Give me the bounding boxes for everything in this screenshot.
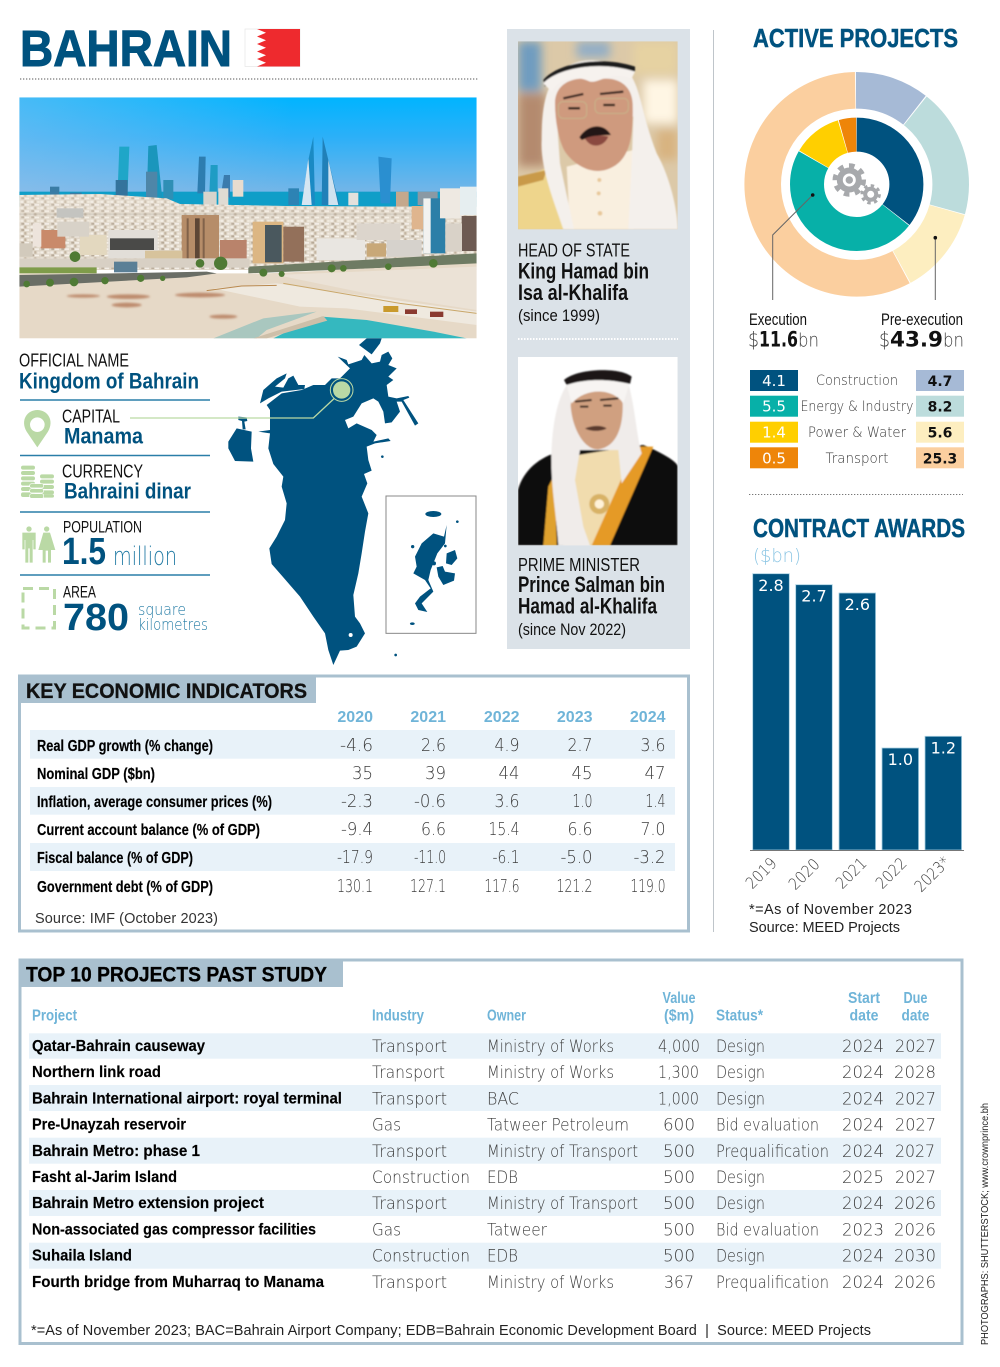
- row 6: 2025: [842, 1168, 884, 1187]
- icon: Bahrain flag: [245, 29, 300, 66]
- chart: contract awards bars: 2.8: [758, 576, 784, 595]
- area: kilometres: [138, 615, 208, 634]
- row 4: Bid evaluation: [716, 1116, 819, 1135]
- row: government debt: 127.1: [410, 877, 446, 897]
- legend: project sectors: [750, 370, 964, 468]
- execution total: 11.6: [759, 328, 798, 352]
- row 5: 500: [663, 1142, 695, 1161]
- year header: 2023: [557, 709, 593, 726]
- row 2: [32, 1063, 936, 1082]
- row: government debt: 121.2: [556, 877, 592, 897]
- chart: contract awards bars: 2019: [742, 854, 781, 893]
- row: fiscal balance: -6.1: [492, 848, 520, 868]
- row 6: Design: [716, 1168, 765, 1187]
- inset map: [386, 496, 476, 633]
- row 10: [32, 1273, 936, 1292]
- row 5: [32, 1142, 935, 1161]
- icon: people: [22, 526, 55, 563]
- row 9: 500: [663, 1247, 695, 1266]
- row: current account balance: Current account balance (% of GDP): [37, 822, 260, 839]
- caption: head of state: King Hamad bin: [518, 258, 649, 284]
- row 5: 2024: [842, 1142, 884, 1161]
- row: real GDP growth: 2.7: [568, 736, 592, 756]
- row 8: 2026: [894, 1220, 936, 1239]
- population: 1.5: [62, 531, 106, 573]
- row: fiscal balance: [37, 848, 666, 868]
- row: real GDP growth: [37, 736, 666, 756]
- row 1: Design: [716, 1037, 765, 1056]
- row 2: 1,300: [658, 1063, 699, 1082]
- area: AREA: [63, 583, 96, 602]
- row 3: Transport: [372, 1089, 447, 1108]
- row 1: Transport: [372, 1037, 447, 1056]
- row 7: Transport: [372, 1194, 447, 1213]
- title: Bahrain: BAHRAIN: [20, 20, 232, 77]
- row 3: 1,000: [658, 1089, 699, 1108]
- chart: contract awards bars: 2.7: [801, 587, 827, 606]
- year header: 2024: [630, 709, 666, 726]
- chart: contract awards bars: 1.0: [888, 750, 913, 769]
- row 3: [32, 1089, 936, 1108]
- row 10: Prequalification: [716, 1273, 829, 1292]
- pre-execution total: [879, 310, 964, 352]
- footnote: *=As of November 2023; BAC=Bahrain Airport Company; EDB=Bahrain Economic Development Board | Source: MEED Projects: [31, 1323, 871, 1339]
- table header: Owner: [487, 1008, 526, 1025]
- row: nominal GDP: 39: [425, 764, 446, 784]
- year header: 2021: [410, 709, 446, 726]
- legend: project sectors: 4.1: [762, 372, 786, 390]
- row 8: Gas: [372, 1220, 401, 1239]
- row 6: 2027: [895, 1168, 936, 1187]
- execution total: $: [748, 328, 759, 352]
- icon: gears: [835, 166, 879, 203]
- row 9: EDB: [487, 1247, 518, 1266]
- row: current account balance: 6.6: [568, 820, 592, 840]
- row 6: 500: [663, 1168, 695, 1187]
- execution total: Execution: [749, 310, 807, 329]
- capital: Manama: [64, 424, 144, 448]
- outer ring: pre-execution: [763, 90, 951, 278]
- icon: dashed area square: [23, 588, 54, 628]
- row 4: Gas: [372, 1116, 401, 1135]
- row: fiscal balance: -3.2: [634, 848, 666, 868]
- table header: Due: [904, 990, 928, 1007]
- currency: CURRENCY: [62, 462, 143, 482]
- legend: project sectors: 25.3: [923, 451, 957, 467]
- legend: project sectors: Transport: [826, 451, 889, 467]
- caption: head of state: Isa al-Khalifa: [518, 280, 629, 305]
- legend: project sectors: 0.5: [762, 449, 786, 467]
- panel: leaders: [507, 29, 690, 649]
- area: [63, 583, 208, 639]
- pre-execution total: Pre-execution: [881, 310, 963, 329]
- row 6: EDB: [487, 1168, 518, 1187]
- execution total: [748, 310, 819, 352]
- population: [62, 518, 177, 573]
- row: current account balance: [37, 820, 666, 840]
- row: current account balance: 7.0: [640, 820, 666, 840]
- pre-execution total: 43.9: [890, 328, 943, 352]
- year header: 2020: [337, 709, 373, 726]
- row 3: Design: [716, 1089, 765, 1108]
- row 6: Construction: [372, 1168, 470, 1187]
- row: inflation: -2.3: [341, 792, 373, 812]
- official name: OFFICIAL NAME: [19, 351, 129, 371]
- row 8: [32, 1220, 936, 1239]
- row 10: 2024: [842, 1273, 884, 1292]
- chart: contract awards bars: [742, 574, 964, 896]
- row 1: 2024: [842, 1037, 884, 1056]
- row 8: Bid evaluation: [716, 1220, 819, 1239]
- source note: Source: IMF (October 2023): [35, 911, 218, 927]
- row 6: [32, 1168, 936, 1187]
- note: contract awards source: Source: MEED Projects: [749, 920, 900, 936]
- row 9: Construction: [372, 1247, 470, 1266]
- table header: Project: [32, 1008, 78, 1025]
- photo credit: PHOTOGRAPHS: SHUTTERSTOCK; www.crownprince.bh: [979, 1103, 991, 1345]
- note: contract awards source: *=As of November 2023: [749, 902, 912, 918]
- row: government debt: 130.1: [337, 877, 373, 897]
- table header: Start: [848, 990, 881, 1007]
- currency: [62, 462, 191, 504]
- caption: prime minister: [518, 555, 665, 639]
- row 9: Suhaila Island: [32, 1248, 132, 1265]
- caption: head of state: (since 1999): [518, 306, 600, 325]
- row 6: Fasht al-Jarim Island: [32, 1169, 177, 1186]
- row 4: Pre-Unayzah reservoir: [32, 1117, 186, 1134]
- legend: project sectors: Energy & Industry: [800, 399, 914, 415]
- row 10: Transport: [372, 1273, 447, 1292]
- legend: project sectors: 5.5: [762, 398, 786, 416]
- chart: contract awards bars: 2022: [872, 854, 911, 893]
- pre-execution total: $: [879, 328, 890, 352]
- leader lines: [773, 193, 937, 300]
- row 1: 4,000: [658, 1037, 700, 1056]
- legend: project sectors: Power & Water: [808, 425, 906, 441]
- row: nominal GDP: 35: [352, 764, 373, 784]
- row: nominal GDP: 47: [644, 764, 666, 784]
- execution total: bn: [798, 330, 819, 352]
- row: inflation: [37, 792, 666, 812]
- chart: contract awards bars: 1.2: [931, 738, 956, 757]
- row 1: [32, 1037, 936, 1056]
- row 1: Qatar-Bahrain causeway: [32, 1038, 205, 1055]
- row: government debt: Government debt (% of GDP): [37, 879, 213, 896]
- row 3: 2027: [895, 1089, 936, 1108]
- connector: capital to Manama: [130, 379, 353, 418]
- table header: Value: [662, 990, 696, 1007]
- row 8: 2023: [842, 1220, 884, 1239]
- row 9: Design: [716, 1247, 765, 1266]
- row: fiscal balance: Fiscal balance (% of GDP): [37, 850, 193, 867]
- row 5: Transport: [372, 1142, 447, 1161]
- area: 780: [63, 597, 129, 639]
- row 9: 2024: [842, 1247, 884, 1266]
- panel: top 10 projects: [19, 959, 962, 1344]
- row: real GDP growth: 4.9: [494, 736, 520, 756]
- row 8: 500: [663, 1220, 695, 1239]
- row 2: Northern link road: [32, 1064, 161, 1081]
- row: government debt: 117.6: [484, 877, 520, 897]
- caption: head of state: HEAD OF STATE: [518, 241, 630, 261]
- capital: [62, 406, 144, 448]
- row: current account balance: 6.6: [421, 820, 446, 840]
- heading: active projects: ACTIVE PROJECTS: [753, 23, 958, 53]
- row 1: 2027: [895, 1037, 936, 1056]
- heading: contract awards: ($bn): [753, 545, 801, 567]
- row 3: BAC: [487, 1089, 519, 1108]
- inner ring: execution: [807, 135, 906, 234]
- row 3: 2024: [842, 1089, 884, 1108]
- note: contract awards source: [749, 902, 912, 936]
- caption: prime minister: Hamad al-Khalifa: [518, 594, 658, 618]
- row 7: Ministry of Transport: [487, 1194, 638, 1213]
- row 4: Tatweer Petroleum: [487, 1116, 629, 1135]
- chart: active projects donut: [763, 90, 951, 300]
- chart: contract awards bars: 2020: [785, 855, 824, 894]
- row 7: [32, 1194, 936, 1213]
- official name: [19, 351, 199, 394]
- caption: prime minister: Prince Salman bin: [518, 572, 665, 597]
- legend: project sectors: 1.4: [762, 424, 786, 442]
- row: fiscal balance: -11.0: [414, 848, 446, 868]
- map: Bahrain: [228, 338, 418, 665]
- legend: project sectors: Construction: [816, 373, 898, 389]
- table header: date: [902, 1008, 930, 1025]
- row: government debt: 119.0: [630, 877, 666, 897]
- row 7: Design: [716, 1194, 765, 1213]
- row 10: Ministry of Works: [487, 1273, 614, 1292]
- row: current account balance: 15.4: [488, 820, 520, 840]
- row: inflation: 1.0: [572, 792, 592, 812]
- chart: contract awards bars: 2023*: [911, 853, 954, 896]
- photo: King Hamad: [518, 41, 678, 229]
- row: real GDP growth: Real GDP growth (% change): [37, 738, 213, 755]
- row: nominal GDP: 44: [498, 764, 520, 784]
- row 5: 2027: [895, 1142, 935, 1161]
- population: million: [113, 542, 177, 572]
- table header: date: [850, 1008, 879, 1025]
- row: nominal GDP: [37, 764, 666, 784]
- legend: project sectors: 5.6: [928, 426, 952, 442]
- row: inflation: -0.6: [414, 792, 446, 812]
- chart: contract awards bars: 2021: [832, 854, 871, 893]
- legend: project sectors: 4.7: [928, 374, 952, 390]
- row 3: Bahrain International airport: royal terminal: [32, 1090, 342, 1107]
- row: government debt: [37, 877, 666, 897]
- row 2: Transport: [372, 1063, 445, 1082]
- row: fiscal balance: -17.9: [337, 848, 373, 868]
- row 9: [32, 1247, 936, 1266]
- caption: prime minister: PRIME MINISTER: [518, 555, 640, 575]
- row 4: 600: [663, 1116, 695, 1135]
- icon: location pin: [24, 410, 51, 447]
- table header: Status*: [716, 1008, 764, 1025]
- panel: official facts: [19, 351, 210, 639]
- table header: [32, 990, 930, 1025]
- row: fiscal balance: -5.0: [560, 848, 592, 868]
- row 4: [32, 1116, 936, 1135]
- row: current account balance: -9.4: [341, 820, 373, 840]
- heading tab: TOP 10 PROJECTS PAST STUDY: [26, 962, 327, 986]
- row: real GDP growth: 2.6: [421, 736, 446, 756]
- capital: CAPITAL: [62, 406, 120, 426]
- row 7: Bahrain Metro extension project: [32, 1195, 264, 1212]
- row: real GDP growth: 3.6: [640, 736, 666, 756]
- row 8: Non-associated gas compressor facilities: [32, 1221, 316, 1238]
- row 7: 2024: [842, 1194, 884, 1213]
- row 4: 2027: [895, 1116, 936, 1135]
- pre-execution total: bn: [943, 330, 964, 352]
- row: inflation: 3.6: [494, 792, 520, 812]
- row 9: 2030: [894, 1247, 936, 1266]
- heading tab: KEY ECONOMIC INDICATORS: [26, 680, 307, 703]
- row 10: 367: [664, 1273, 694, 1292]
- row 2: Design: [716, 1063, 765, 1082]
- row 7: 2026: [894, 1194, 936, 1213]
- heading: contract awards: [753, 513, 965, 567]
- row 8: Tatweer: [487, 1220, 547, 1239]
- population: POPULATION: [63, 518, 142, 537]
- row 5: Ministry of Transport: [487, 1142, 638, 1161]
- row 1: Ministry of Works: [487, 1037, 614, 1056]
- photo: Manama skyline: [19, 97, 477, 338]
- row 10: Fourth bridge from Muharraq to Manama: [32, 1274, 324, 1291]
- row 10: 2026: [894, 1273, 936, 1292]
- row 2: 2024: [842, 1063, 884, 1082]
- legend: project sectors: 8.2: [928, 400, 952, 416]
- chart: contract awards bars: 2.6: [845, 595, 870, 614]
- row 4: 2024: [842, 1116, 884, 1135]
- row: inflation: 1.4: [646, 792, 666, 812]
- year header: 2022: [484, 709, 520, 726]
- row: nominal GDP: 45: [572, 764, 592, 784]
- row 5: Prequalification: [716, 1142, 829, 1161]
- row 5: Bahrain Metro: phase 1: [32, 1143, 200, 1160]
- table header: Industry: [372, 1008, 424, 1025]
- table header: ($m): [664, 1008, 694, 1025]
- panel: key economic indicators: [19, 676, 688, 931]
- row 2: Ministry of Works: [487, 1063, 614, 1082]
- row 7: 500: [663, 1194, 695, 1213]
- caption: prime minister: (since Nov 2022): [518, 620, 626, 639]
- caption: head of state: [518, 241, 649, 325]
- row 2: 2028: [894, 1063, 936, 1082]
- currency: Bahraini dinar: [64, 478, 191, 504]
- row: inflation: Inflation, average consumer prices (%): [37, 794, 272, 811]
- year header: [337, 709, 666, 726]
- official name: Kingdom of Bahrain: [19, 368, 199, 394]
- area: square: [138, 600, 186, 619]
- icon: coins: [21, 466, 54, 498]
- row: nominal GDP: Nominal GDP ($bn): [37, 766, 155, 783]
- row: real GDP growth: -4.6: [340, 736, 373, 756]
- photo: Prince Salman: [518, 357, 678, 545]
